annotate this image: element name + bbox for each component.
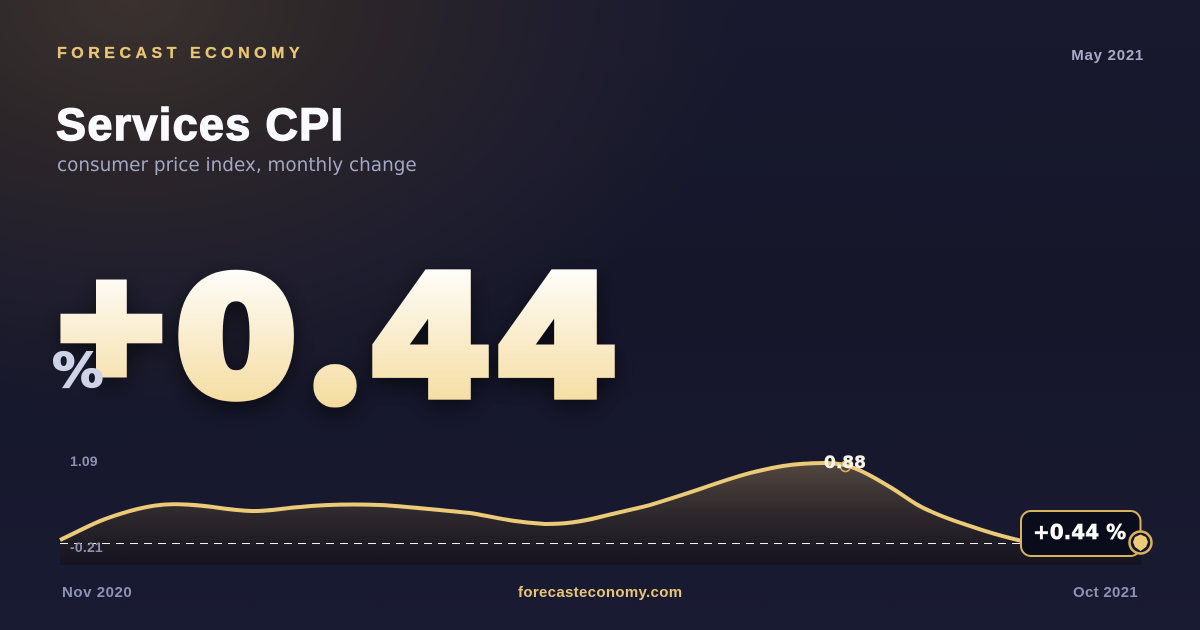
baseline <box>60 542 1141 544</box>
big value: . <box>333 376 337 390</box>
min label: -0.21 <box>70 539 103 555</box>
callout text: +0.44 % <box>1033 520 1126 544</box>
start date: Nov 2020 <box>62 584 132 601</box>
max label: 1.09 <box>70 453 98 469</box>
big value: 4 <box>370 243 491 433</box>
site url: forecasteconomy.com <box>518 584 682 601</box>
brand label: FORECAST ECONOMY <box>57 45 304 62</box>
date: May 2021 <box>1071 47 1144 64</box>
area fill <box>60 463 1141 565</box>
peak label: 0.88 <box>824 453 866 473</box>
end marker <box>1130 532 1152 554</box>
end date: Oct 2021 <box>1073 584 1138 601</box>
value callout <box>1021 511 1140 556</box>
peak marker <box>840 462 850 472</box>
percent unit: % <box>52 344 104 399</box>
big value: 4 <box>496 243 617 433</box>
line <box>60 463 1022 541</box>
big value: + <box>53 247 170 403</box>
subtitle: consumer price index, monthly change <box>57 155 417 176</box>
title: Services CPI <box>56 99 344 150</box>
big value: 0 <box>176 246 296 432</box>
